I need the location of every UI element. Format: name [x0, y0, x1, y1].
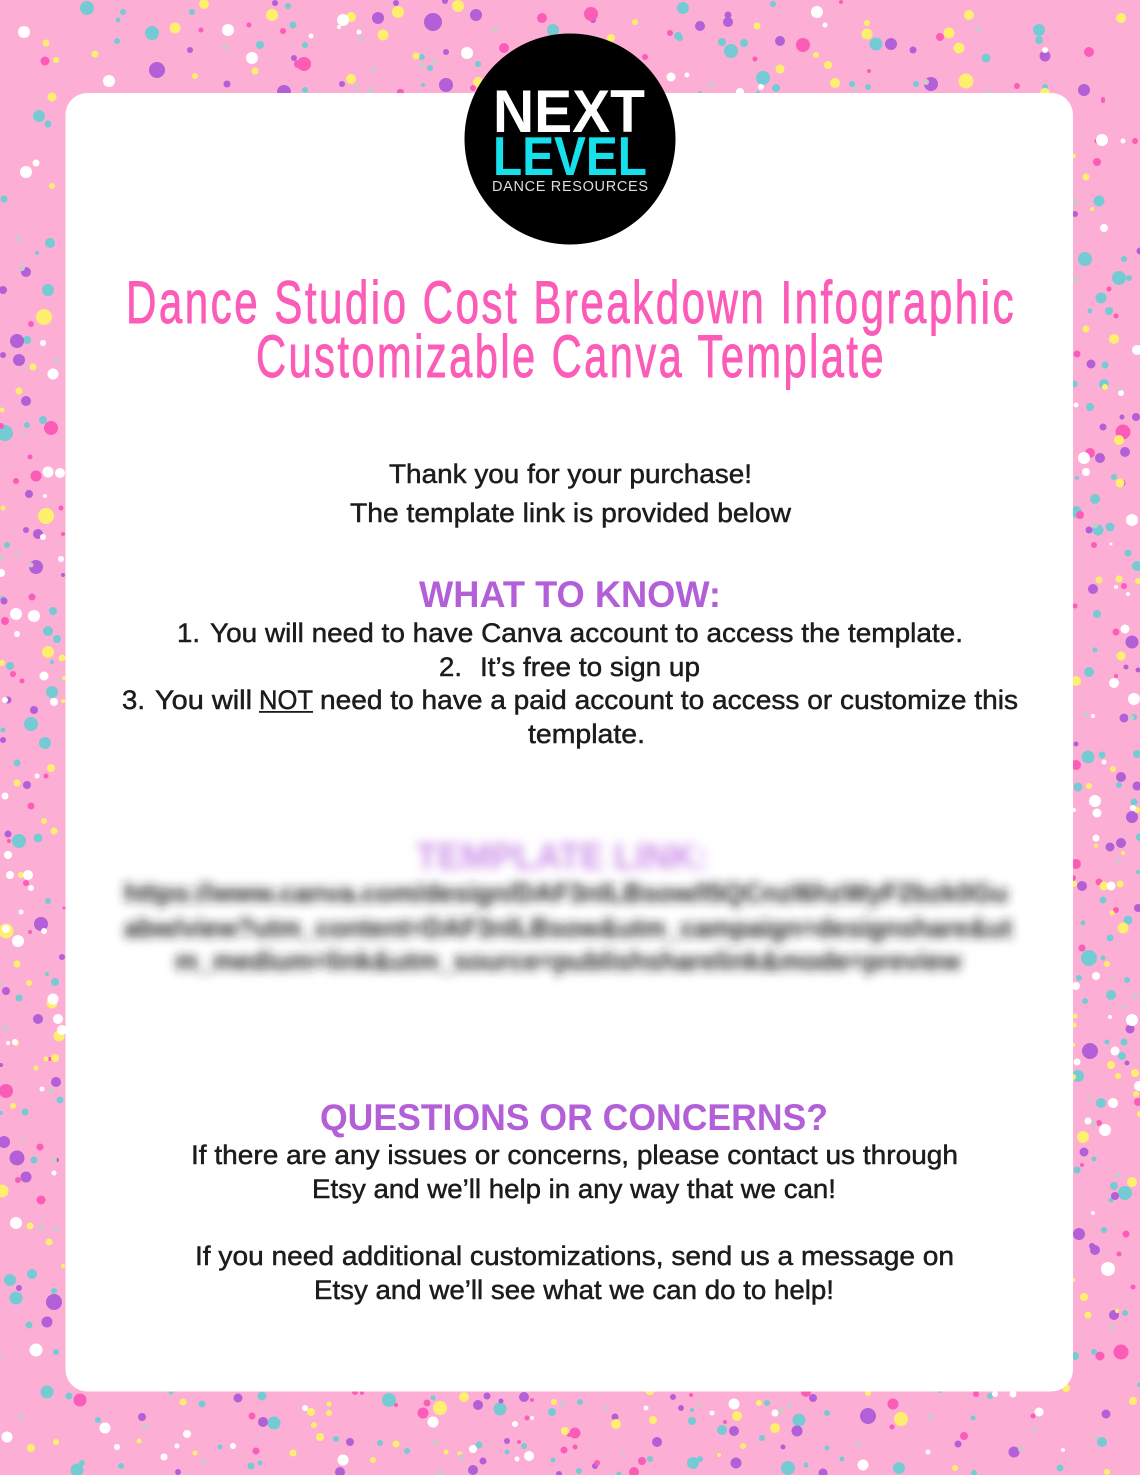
what to know list: You will need to have Canva account to access the template. [210, 618, 963, 648]
contact paragraph: If there are any issues or concerns, please contact us through [191, 1140, 958, 1170]
logo badge: LEVEL [493, 125, 647, 187]
heading: questions or concerns: QUESTIONS OR CONCERNS? [320, 1097, 828, 1138]
customization paragraph: If you need additional customizations, send us a message on [195, 1241, 954, 1271]
what to know list: template. [528, 719, 645, 749]
thank you message [350, 459, 792, 528]
blurred template link: m_medium=link&utm_source=publishsharelink&mode=preview [175, 946, 962, 976]
thank you message: The template link is provided below [350, 498, 792, 528]
customization paragraph: Etsy and we’ll see what we can do to help! [314, 1275, 834, 1305]
what to know list: It’s free to sign up [480, 652, 700, 682]
blurred template link: https://www.canva.com/design/DAF3nlLBsow/I5QCnzl6hzWyF2bzk0Gu [124, 878, 1008, 908]
what to know list: You will [155, 685, 252, 715]
logo badge [464, 34, 676, 244]
title: Customizable Canva Template [256, 323, 886, 390]
contact paragraph [191, 1140, 958, 1204]
white content card [66, 93, 1073, 1392]
title [126, 269, 1016, 390]
what to know list: NOT [259, 685, 313, 715]
logo badge: DANCE RESOURCES [492, 179, 648, 195]
blurred template link: TEMPLATE LINK: [416, 836, 708, 877]
what to know list: need to have a paid account to access or customize this [320, 685, 1018, 715]
thank you message: Thank you for your purchase! [389, 459, 752, 489]
logo badge: NEXT [493, 78, 645, 145]
blurred template link [124, 836, 1012, 976]
contact paragraph: Etsy and we’ll help in any way that we can! [312, 1174, 836, 1204]
blurred template link: abw/view?utm_content=DAF3nlLBsow&utm_campaign=designshare&ut [124, 913, 1012, 943]
what to know list [122, 618, 1018, 749]
customization paragraph [195, 1241, 954, 1305]
what to know list: 1. [177, 618, 200, 648]
heading: what to know: WHAT TO KNOW: [419, 574, 721, 615]
what to know list: 2. [439, 652, 462, 682]
what to know list: 3. [122, 685, 145, 715]
